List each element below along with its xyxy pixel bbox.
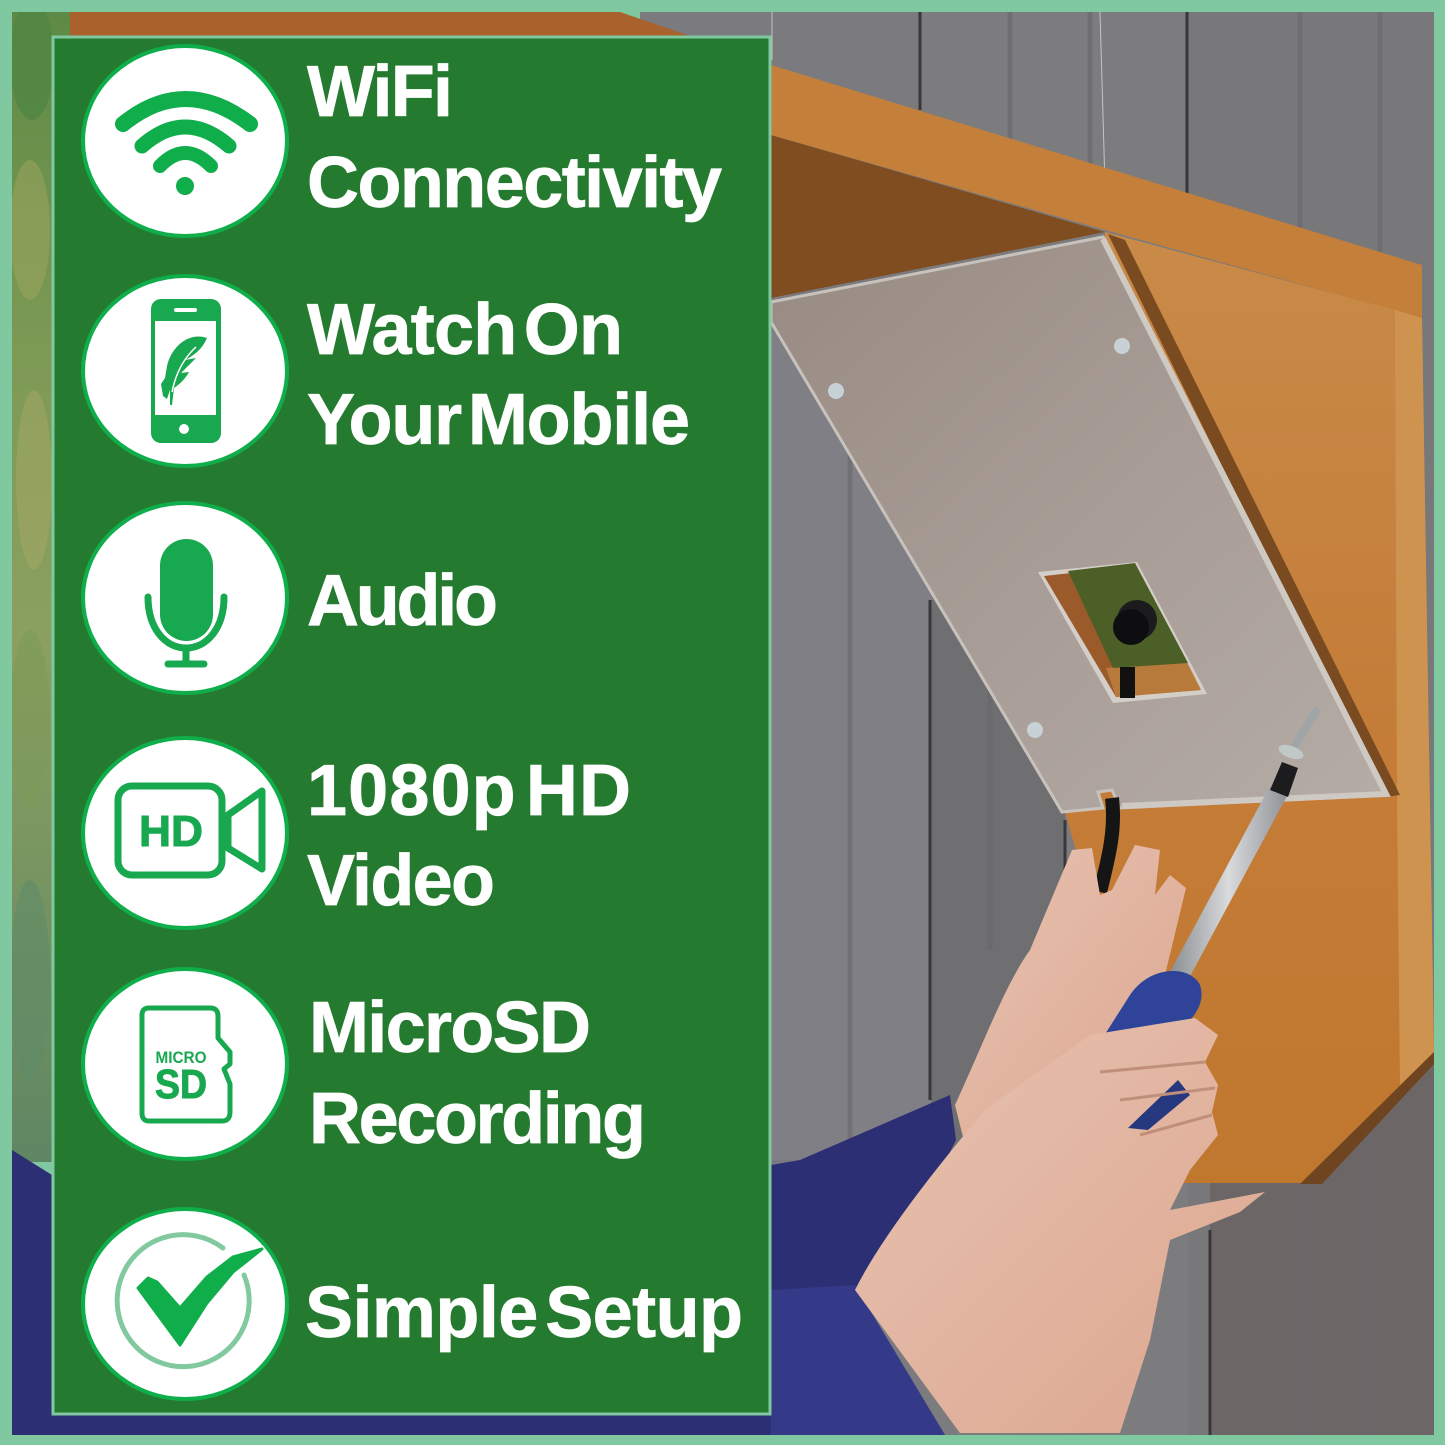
heading: WiFi Connectivity: Connectivity bbox=[307, 143, 722, 223]
icon: HD video camera: HD bbox=[139, 807, 203, 856]
feature panel bbox=[53, 37, 770, 1414]
photo: navy sleeves bbox=[12, 1095, 956, 1435]
photo: box side bbox=[1065, 232, 1434, 1183]
heading: Watch On Your Mobile: Watch On bbox=[307, 290, 623, 370]
icon: phone with feather bbox=[83, 276, 287, 466]
photo: frosted acrylic plate bbox=[771, 237, 1388, 812]
photo: back hand bbox=[955, 845, 1186, 1145]
heading: 1080p HD Video: 1080p HD bbox=[307, 751, 631, 831]
icon: wifi badge bbox=[83, 46, 287, 236]
icon: microphone bbox=[83, 503, 287, 693]
feature: WiFi Connectivity bbox=[83, 46, 722, 236]
icon: microSD card: SD bbox=[155, 1061, 207, 1107]
photo: side strip bbox=[1395, 310, 1434, 1085]
feature: Watch On Your Mobile bbox=[83, 276, 690, 466]
photo: handle between fingers bbox=[1128, 1080, 1190, 1130]
heading: Simple Setup: Simple Setup bbox=[305, 1273, 743, 1353]
heading: Watch On Your Mobile: Your Mobile bbox=[307, 380, 690, 460]
heading: WiFi Connectivity: WiFi bbox=[307, 52, 453, 132]
photo: wooden fence planks bbox=[640, 12, 1435, 1435]
photo: roof underside bbox=[771, 135, 1105, 298]
feature: Audio bbox=[83, 503, 498, 693]
feature: MicroSD Recording bbox=[83, 969, 646, 1159]
photo: front hand bbox=[855, 1018, 1265, 1433]
photo: black cable bbox=[1100, 798, 1113, 892]
photo: plate edge highlight bbox=[1103, 239, 1386, 806]
heading: 1080p HD Video: Video bbox=[307, 841, 495, 921]
photo: lower edge shadow bbox=[1300, 1052, 1434, 1184]
icon: microSD card bbox=[83, 969, 287, 1159]
icon: HD video camera bbox=[83, 738, 287, 928]
heading: MicroSD Recording: MicroSD bbox=[309, 988, 591, 1068]
feature: Simple Setup bbox=[83, 1209, 743, 1399]
photo: camera opening bbox=[1038, 562, 1207, 703]
photo: screwdriver bbox=[1095, 708, 1318, 1050]
heading: MicroSD Recording: Recording bbox=[309, 1079, 646, 1159]
photo: roof front edge bbox=[771, 65, 1422, 318]
photo: garden foliage bbox=[10, 0, 72, 1162]
photo: finger creases bbox=[1100, 1062, 1215, 1135]
icon: check mark in ring bbox=[83, 1209, 287, 1399]
photo: plate screws bbox=[828, 338, 1130, 738]
icon: microSD card: MICRO bbox=[156, 1048, 206, 1067]
feature: 1080p HD Video bbox=[83, 738, 631, 928]
photo: strip of wood behind panel bbox=[70, 12, 690, 36]
photo: plate shadow on wood bbox=[1108, 234, 1400, 797]
heading: Audio: Audio bbox=[307, 561, 498, 641]
photo: camera board bbox=[1068, 563, 1188, 668]
